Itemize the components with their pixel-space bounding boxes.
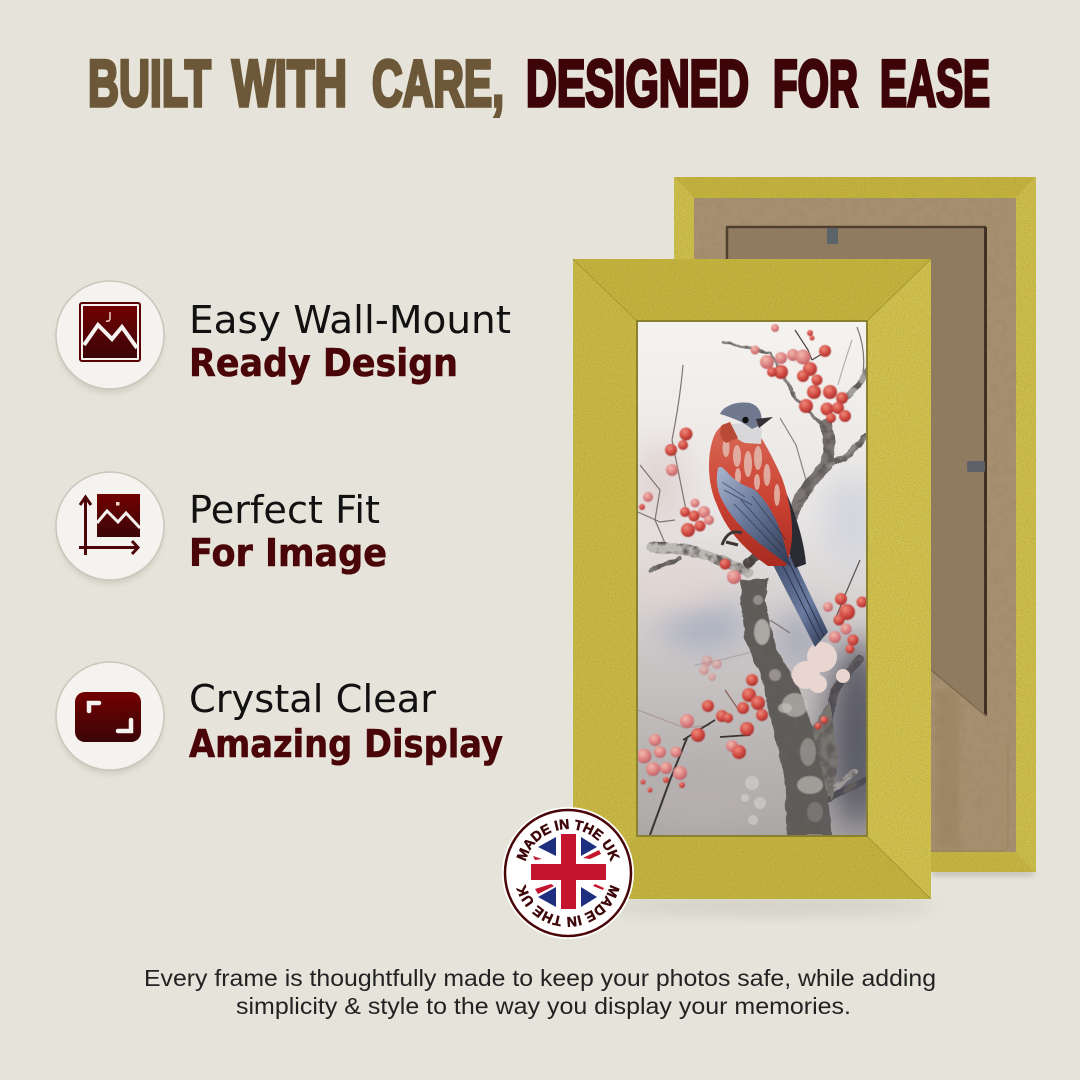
label: ready design: Ready Design: [189, 341, 458, 385]
feature: easy wall-mount: [56, 281, 511, 393]
feature: crystal clear: [56, 662, 503, 774]
footer text: [144, 965, 936, 1019]
back frame shadow: [932, 870, 1034, 876]
thin twigs: [638, 327, 864, 835]
feature: perfect fit: [56, 472, 387, 584]
title: [88, 46, 990, 120]
title part: designed for ease: DESIGNED: [526, 46, 749, 120]
gold moulding front: [573, 259, 931, 899]
pale blossoms: [792, 642, 850, 693]
grey head: [720, 402, 762, 429]
red breast: [709, 425, 792, 566]
side turn clip: [967, 461, 985, 472]
label: amazing display: Amazing Display: [189, 722, 503, 766]
icon badge: display with corner brackets: [56, 662, 164, 774]
folding easel stand: [931, 670, 1008, 851]
back of frame: [674, 177, 1036, 876]
icon badge: picture with hook: [56, 281, 164, 393]
icon badge: picture with dimension arrows: [56, 472, 164, 584]
hanger slot: [827, 228, 838, 244]
recessed backing opening: [726, 227, 986, 717]
badge disc: [502, 807, 634, 939]
label: crystal clear: Crystal Clear: [189, 677, 436, 721]
white throat: [731, 423, 762, 444]
mdf backing board: [694, 198, 1016, 852]
title part: designed for ease: EASE: [880, 46, 990, 120]
eye: [742, 417, 749, 423]
title part: built with care: BUILT: [88, 46, 211, 120]
pale feather flecks: [722, 439, 780, 506]
beak: [756, 417, 773, 428]
union flag: [531, 834, 606, 909]
footer line 1: Every frame is thoughtfully made to keep your photos safe, while adding: [144, 965, 936, 991]
label: easy wall-mount: Easy Wall-Mount: [189, 298, 511, 342]
trunk bark highlights: [753, 595, 823, 822]
folded wing: [717, 467, 790, 566]
title part: designed for ease: FOR: [773, 46, 858, 120]
label: for image: For Image: [189, 531, 387, 575]
bokeh spots: [741, 776, 766, 825]
front frame shadow on wall: [605, 897, 935, 915]
paper wash: [638, 322, 866, 835]
gold moulding back: [674, 177, 1036, 872]
title part: built with care: WITH: [232, 46, 347, 120]
front of frame: [573, 259, 931, 899]
dark wing tip: [786, 494, 806, 568]
feet: [722, 532, 742, 545]
tail: [768, 555, 828, 647]
footer line 2: simplicity & style to the way you display your memories.: [236, 993, 851, 1019]
badge text bottom: MADE IN THE UK: [516, 884, 620, 928]
title part: built with care: CARE,: [372, 46, 504, 120]
badge text top: MADE IN THE UK: [516, 818, 620, 862]
bird: [709, 402, 828, 647]
berries: [636, 324, 868, 792]
title part: built with care: [88, 46, 504, 120]
tree limbs and trunk: [650, 342, 868, 835]
artwork: bird on berry branch: [638, 322, 866, 835]
label: perfect fit: Perfect Fit: [189, 488, 380, 532]
made in the uk badge: [502, 807, 634, 939]
